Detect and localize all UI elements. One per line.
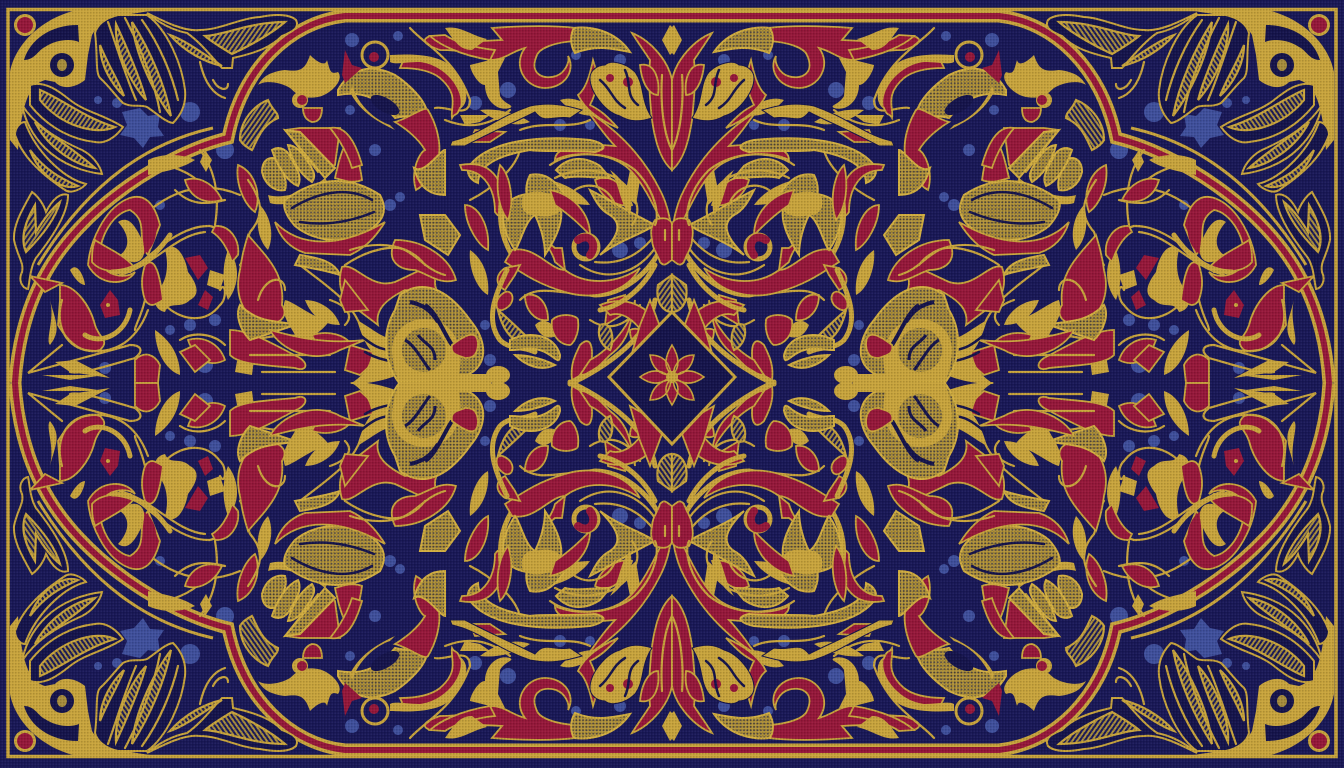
quadrant: top right — [672, 10, 1336, 384]
quadrant: bottom left — [8, 382, 672, 756]
quadrant: bottom right — [672, 382, 1336, 756]
quadrant: top left — [8, 10, 672, 384]
central flower — [640, 345, 704, 405]
central diamond frame — [609, 312, 735, 444]
